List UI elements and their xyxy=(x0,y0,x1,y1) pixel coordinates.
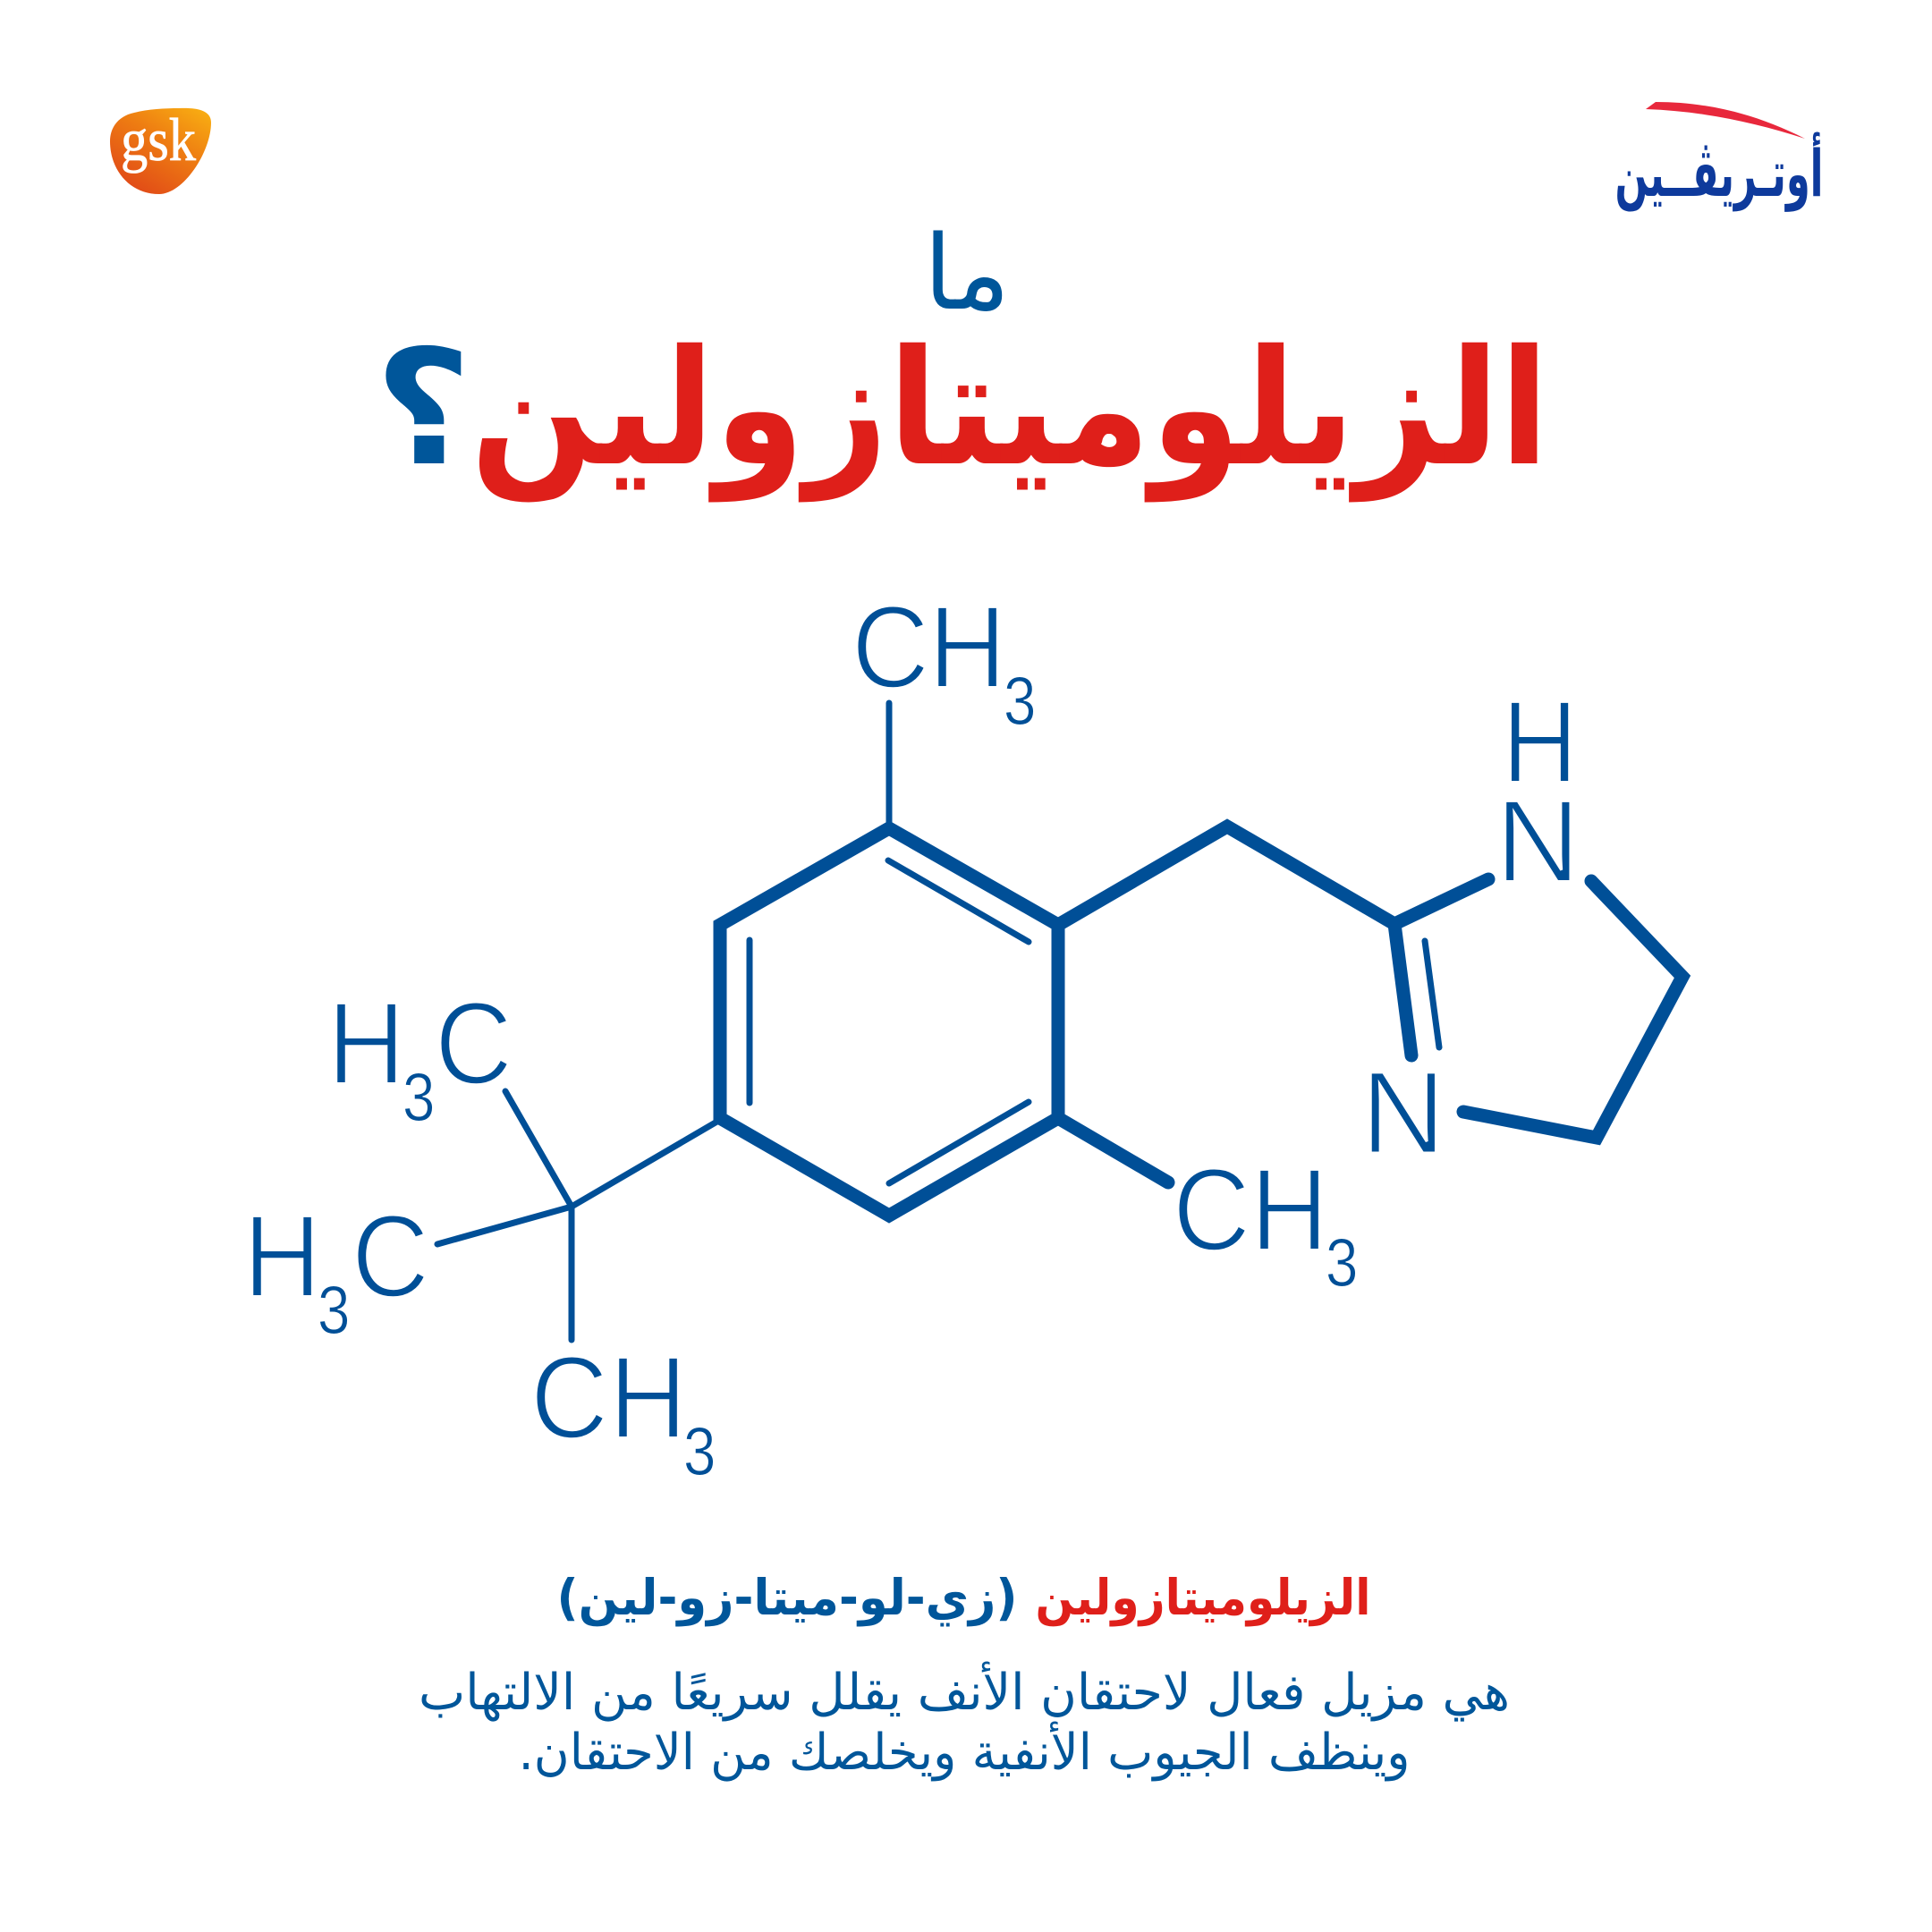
icon: gsk logo: gsk xyxy=(121,106,196,174)
methylene bridge and imidazoline ring bonds xyxy=(1058,826,1682,1138)
label: upper H3C: C xyxy=(435,978,513,1109)
subheading: pronunciation: الزيلوميتازولين xyxy=(1036,1569,1370,1627)
label: bottom CH3: 3 xyxy=(683,1414,716,1490)
subheading: pronunciation: (زي-لو-ميتا-زو-لين) xyxy=(556,1569,1018,1627)
label: upper H3C: 3 xyxy=(402,1060,435,1136)
label: H above N: H xyxy=(1502,677,1578,808)
methyl and tert-butyl bonds xyxy=(437,703,1168,1340)
label: right CH3: C xyxy=(1173,1144,1250,1275)
label: bottom CH3: H xyxy=(609,1332,687,1463)
title line: question word: ما xyxy=(924,214,1010,334)
label: right CH3: H xyxy=(1250,1144,1328,1275)
label: upper H3C xyxy=(327,978,513,1136)
label: lower H3C: H xyxy=(243,1191,321,1322)
title line: xylometazoline with question mark: الزيلوميتازولين xyxy=(470,316,1549,503)
label: N bottom: N xyxy=(1361,1046,1445,1178)
chemical structure diagram xyxy=(243,581,1682,1490)
label: lower H3C: 3 xyxy=(318,1273,350,1349)
body text xyxy=(419,1661,1510,1782)
title line: xylometazoline with question mark: ؟ xyxy=(374,316,472,501)
label: top CH3: 3 xyxy=(1004,664,1036,740)
subheading: pronunciation xyxy=(556,1569,1370,1627)
label: N top: N xyxy=(1496,775,1580,907)
label: bottom CH3 xyxy=(530,1332,716,1490)
label: bottom CH3: C xyxy=(530,1332,608,1463)
label: lower H3C: C xyxy=(352,1191,429,1322)
body text: هي مزيل فعال لاحتقان الأنف يقلل سريعًا من الالتهاب xyxy=(419,1661,1510,1722)
label: upper H3C: H xyxy=(327,978,405,1109)
label: lower H3C xyxy=(243,1191,429,1349)
label: top CH3: H xyxy=(928,581,1006,713)
label: right CH3: 3 xyxy=(1326,1225,1358,1301)
label: top CH3 xyxy=(852,581,1036,740)
body text: وينظف الجيوب الأنفية ويخلصك من الاحتقان. xyxy=(519,1721,1410,1782)
icon: Otrivin logo xyxy=(1615,102,1823,212)
icon: gsk logo xyxy=(110,106,211,194)
benzene ring xyxy=(720,828,1058,1216)
label: top CH3: C xyxy=(852,581,929,713)
label: right CH3 xyxy=(1173,1144,1358,1301)
